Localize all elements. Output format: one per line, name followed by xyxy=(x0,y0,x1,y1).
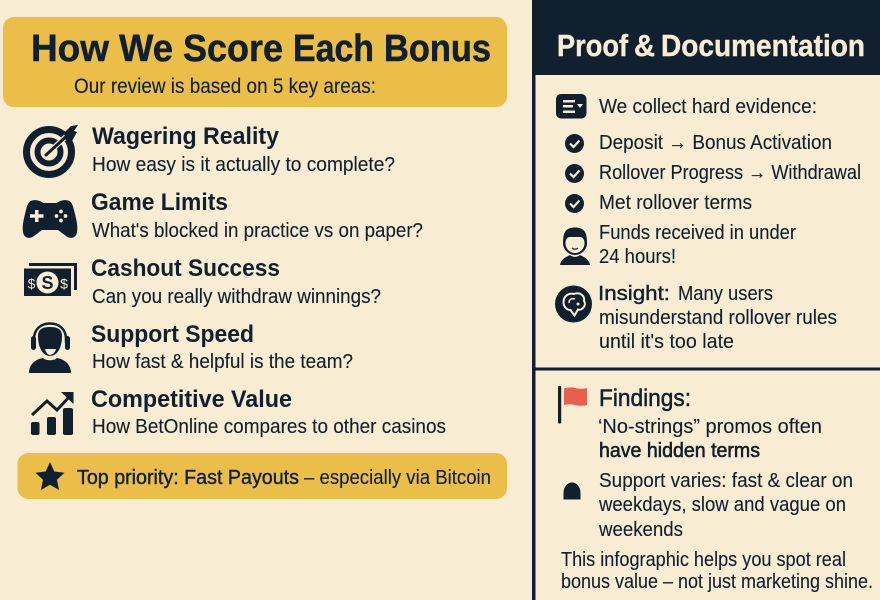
title: Score xyxy=(183,28,283,70)
description: What's blocked in practice vs on paper? xyxy=(92,219,423,242)
description: How fast & helpful is the team? xyxy=(92,350,353,373)
icon: cash stack: $ xyxy=(60,276,68,292)
item: wagering reality xyxy=(26,123,395,176)
callout text: Top priority: Fast Payouts xyxy=(77,466,299,489)
insight text xyxy=(598,282,837,353)
icon: target xyxy=(26,125,78,174)
heading: Support Speed xyxy=(91,321,254,348)
header bar xyxy=(532,0,880,75)
description: How easy is it actually to complete? xyxy=(92,153,395,176)
item: competitive value xyxy=(31,386,446,438)
finding: no strings: ‘No-strings” promos often xyxy=(598,415,822,438)
icon: cash stack: $ xyxy=(28,276,36,292)
icon: cash stack xyxy=(24,264,76,296)
funds text: 24 hours! xyxy=(599,245,676,268)
title: Bonus xyxy=(384,28,491,70)
heading: Game Limits xyxy=(91,189,228,216)
heading: Competitive Value xyxy=(91,386,292,413)
icon: bell xyxy=(564,482,580,500)
header banner xyxy=(3,17,507,107)
title xyxy=(31,28,491,70)
icon: red flag xyxy=(558,386,587,424)
insight text: misunderstand rollover rules xyxy=(599,306,837,329)
checklist item: terms: Met rollover terms xyxy=(599,191,752,214)
checklist item: deposit: Deposit → Bonus Activation xyxy=(599,131,832,154)
item: support speed xyxy=(29,321,353,373)
insight text: until it's too late xyxy=(599,330,734,353)
icon: insight head xyxy=(555,286,592,322)
panel: proof and documentation xyxy=(532,0,880,600)
title: How xyxy=(31,28,109,70)
item: cashout success xyxy=(24,255,381,308)
insight text: Many users xyxy=(678,282,773,305)
icon: support agent xyxy=(29,324,71,373)
title: Each xyxy=(293,28,374,70)
callout text: – especially via Bitcoin xyxy=(304,466,491,489)
finding: support varies xyxy=(598,469,853,541)
funds text xyxy=(599,221,796,268)
heading: Cashout Success xyxy=(91,255,280,282)
funds text: Funds received in under xyxy=(599,221,796,244)
heading: Wagering Reality xyxy=(92,123,279,150)
finding: support varies: Support varies: fast & clear on xyxy=(599,469,853,492)
panel: how we score xyxy=(3,17,507,499)
finding: no strings: have hidden terms xyxy=(599,439,760,462)
subtitle: Our review is based on 5 key areas: xyxy=(74,75,376,98)
evidence heading: We collect hard evidence: xyxy=(599,95,817,118)
icon: person with headset xyxy=(560,228,590,265)
panel title: & xyxy=(634,28,655,63)
description: How BetOnline compares to other casinos xyxy=(92,415,446,438)
title: We xyxy=(119,28,173,70)
icon: document list xyxy=(556,94,586,118)
closing note: This infographic helps you spot real xyxy=(561,548,846,571)
icon: game controller xyxy=(23,200,77,238)
callout: top priority xyxy=(18,453,507,499)
icon: cash stack: S xyxy=(41,273,54,293)
icon: growth chart xyxy=(31,392,74,435)
finding: support varies: weekdays, slow and vague on xyxy=(598,493,846,516)
panel title: Proof xyxy=(557,28,629,63)
finding: no strings xyxy=(598,415,822,462)
closing note xyxy=(561,548,873,593)
finding: support varies: weekends xyxy=(598,518,683,541)
item: game limits xyxy=(23,189,423,242)
findings heading: Findings: xyxy=(599,385,691,412)
icon: star xyxy=(36,462,64,490)
callout text xyxy=(77,466,491,489)
description: Can you really withdraw winnings? xyxy=(92,285,381,308)
panel title xyxy=(557,28,865,63)
panel title: Documentation xyxy=(661,28,865,63)
insight text: Insight: xyxy=(598,282,670,305)
